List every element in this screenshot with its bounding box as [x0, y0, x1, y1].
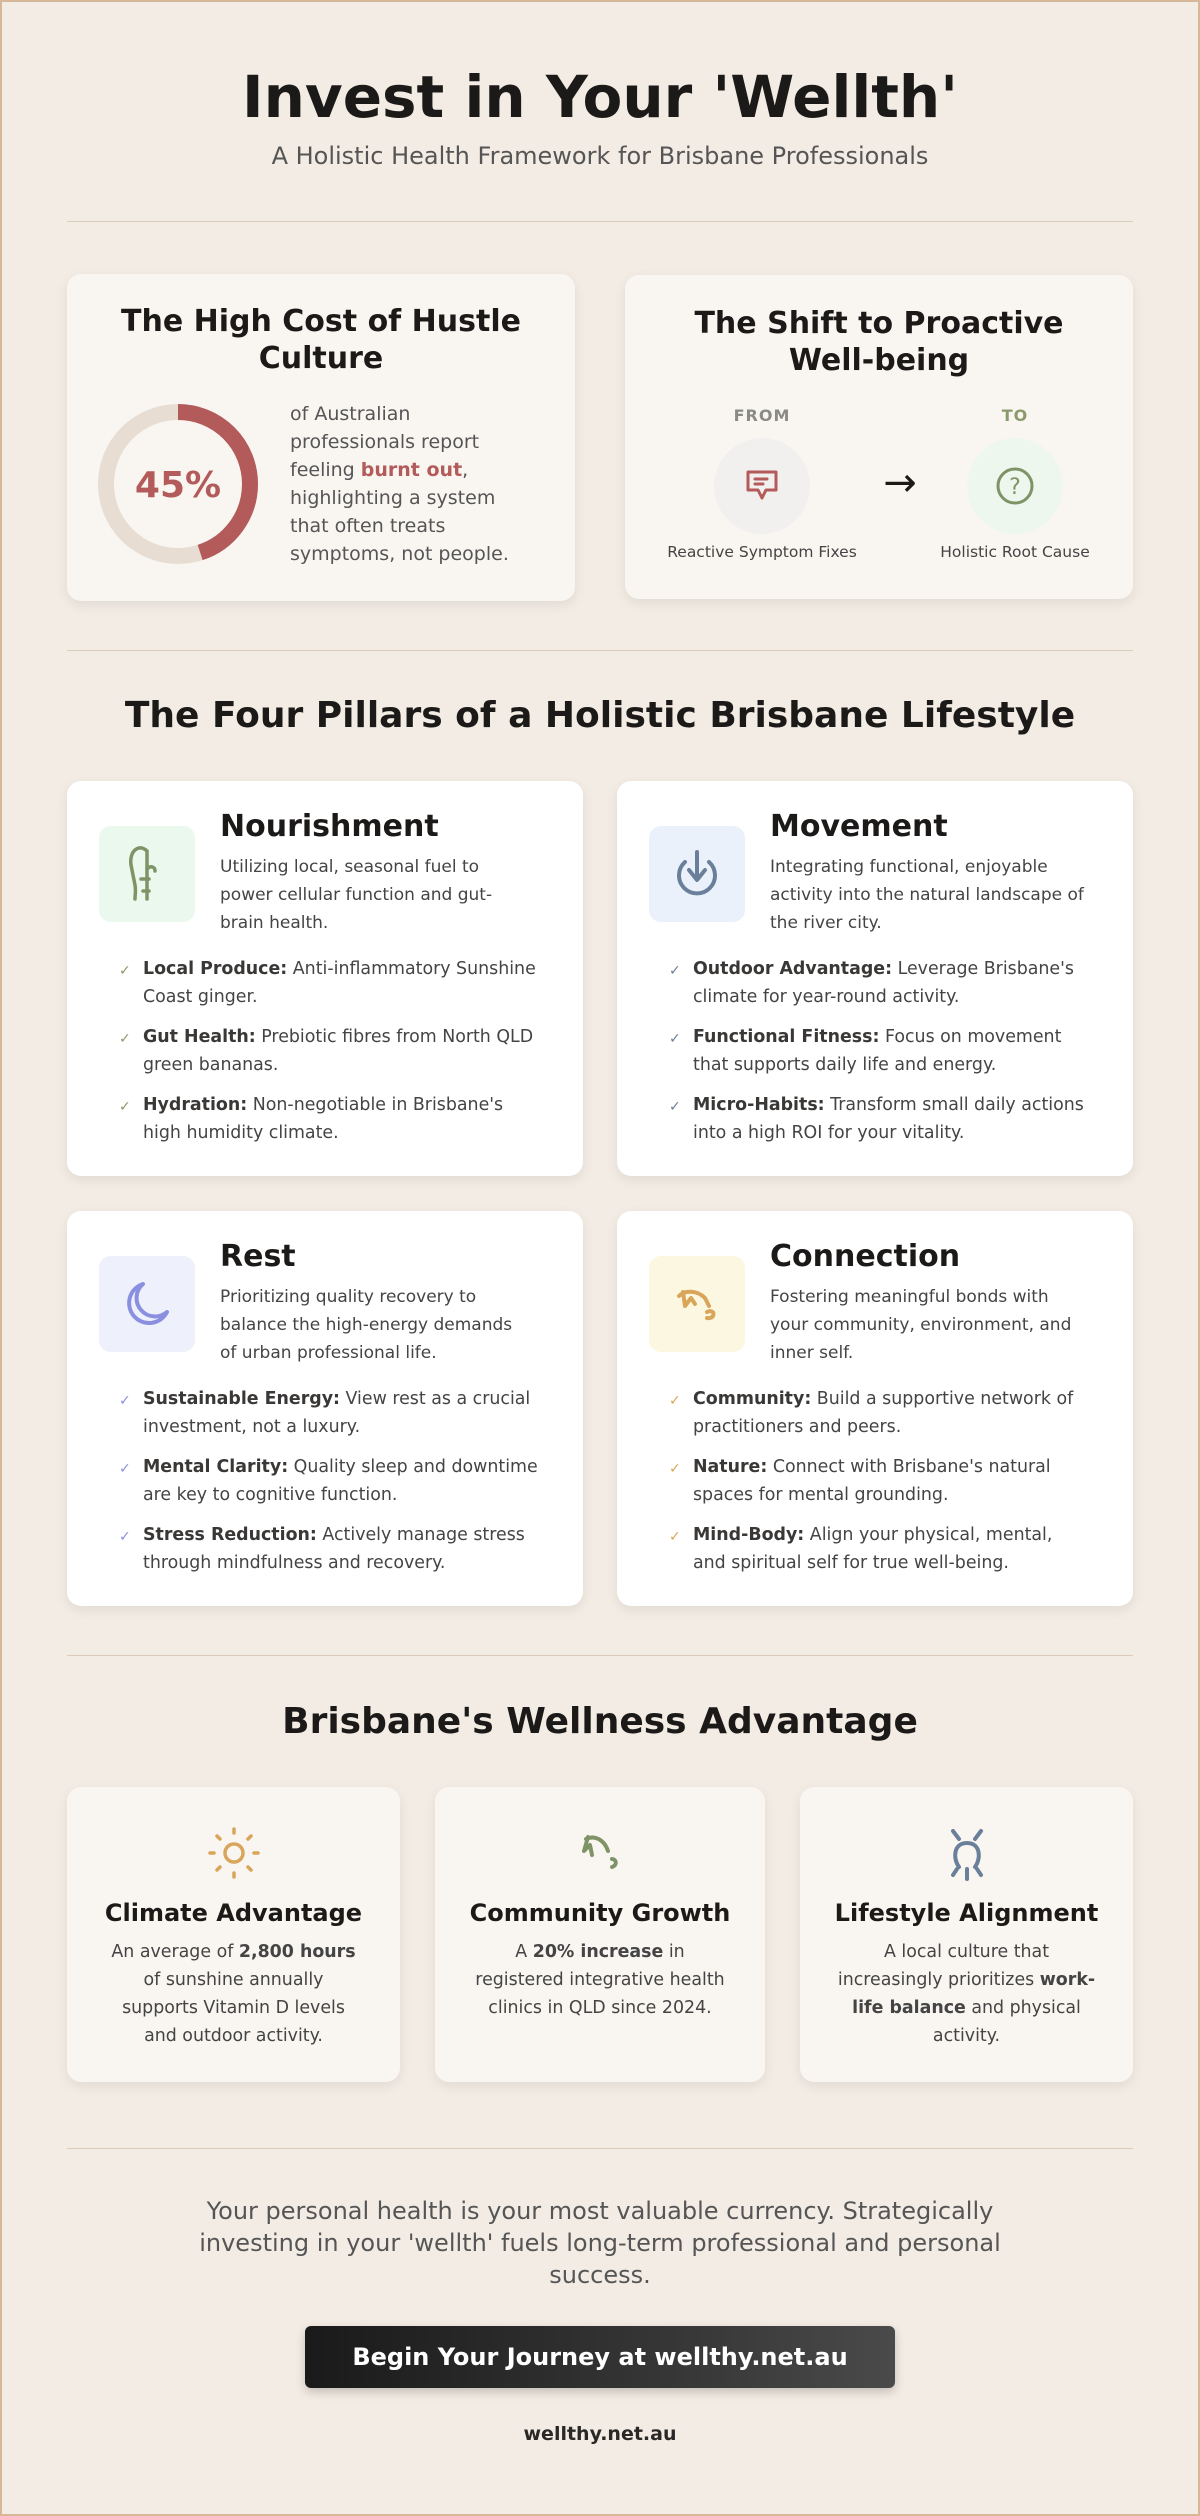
checklist: Nature: Connect with Brisbane's natural spaces for mental grounding. [693, 1457, 1051, 1505]
icon: root cause [967, 438, 1063, 534]
checklist: ✓ [669, 1099, 681, 1115]
description: Prioritizing quality recovery to balance the high-energy demands of urban professional life. [220, 1287, 512, 1363]
description: Utilizing local, seasonal fuel to power cellular function and gut-brain health. [220, 857, 492, 933]
from label: FROM [734, 406, 790, 425]
checklist: Outdoor Advantage: Leverage Brisbane's climate for year-round activity. [693, 959, 1074, 1007]
checklist: Local Produce: Anti-inflammatory Sunshine Coast ginger. [143, 959, 536, 1007]
title: Rest [220, 1239, 296, 1274]
checklist: Mental Clarity: Quality sleep and downtime are key to cognitive function. [143, 1457, 538, 1505]
checklist: ✓ [669, 1393, 681, 1409]
panel: community growth [435, 1787, 765, 2082]
checklist: Micro-Habits: Transform small daily actions into a high ROI for your vitality. [693, 1095, 1084, 1143]
title: Climate Advantage [105, 1899, 362, 1927]
button: cta: Begin Your Journey at wellthy.net.au [352, 2343, 848, 2371]
checklist: Stress Reduction: Actively manage stress through mindfulness and recovery. [143, 1525, 525, 1573]
text: A local culture that increasingly prioritizes work-life balance and physical activity. [838, 1942, 1095, 2046]
icon: nourishment [99, 826, 195, 922]
panel: rest [67, 1211, 583, 1606]
heading: shift: Well-being [789, 343, 969, 378]
donut chart 45% [98, 404, 258, 564]
checklist: ✓ [119, 1393, 131, 1409]
title: Nourishment [220, 809, 439, 844]
title: Lifestyle Alignment [835, 1899, 1098, 1927]
subtitle: A Holistic Health Framework for Brisbane Professionals [272, 142, 928, 170]
description: Integrating functional, enjoyable activity into the natural landscape of the river city. [770, 857, 1084, 933]
title: Connection [770, 1239, 960, 1274]
checklist: Mind-Body: Align your physical, mental, and spiritual self for true well-being. [693, 1525, 1052, 1573]
icon: movement [649, 826, 745, 922]
checklist: Functional Fitness: Focus on movement that supports daily life and energy. [693, 1027, 1061, 1075]
text: A 20% increase in registered integrative health clinics in QLD since 2024. [475, 1942, 725, 2018]
checklist [119, 1389, 538, 1573]
heading: hustle [121, 304, 521, 376]
checklist: ✓ [119, 1529, 131, 1545]
panel: climate [67, 1787, 400, 2082]
footer: wellthy.net.au [524, 2423, 676, 2445]
donut chart 45%: 45% [135, 465, 221, 506]
title: Movement [770, 809, 948, 844]
panel: shift to proactive [625, 275, 1133, 599]
checklist: Gut Health: Prebiotic fibres from North QLD green bananas. [143, 1027, 533, 1075]
panel: connection [617, 1211, 1133, 1606]
icon: connection [649, 1256, 745, 1352]
checklist [119, 959, 536, 1143]
to caption: Holistic Root Cause [940, 543, 1090, 561]
icon: root cause: ? [1009, 475, 1021, 500]
checklist: ✓ [669, 1461, 681, 1477]
icon: lifestyle [950, 1828, 984, 1881]
checklist: ✓ [669, 1031, 681, 1047]
checklist: ✓ [669, 1529, 681, 1545]
checklist: Community: Build a supportive network of practitioners and peers. [693, 1389, 1073, 1437]
icon: growth [582, 1835, 618, 1869]
panel: hustle culture [67, 274, 575, 601]
title: Invest in Your 'Wellth' [242, 63, 958, 131]
checklist: ✓ [669, 963, 681, 979]
heading: four pillars: The Four Pillars of a Holistic Brisbane Lifestyle [125, 695, 1075, 736]
from caption: Reactive Symptom Fixes [667, 543, 857, 561]
checklist: Hydration: Non-negotiable in Brisbane's high humidity climate. [143, 1095, 503, 1143]
checklist: ✓ [119, 1031, 131, 1047]
arrow: → [883, 460, 917, 506]
heading: shift: The Shift to Proactive [694, 306, 1064, 341]
title: Community Growth [470, 1899, 730, 1927]
description: Fostering meaningful bonds with your community, environment, and inner self. [770, 1287, 1071, 1363]
icon: moon [99, 1256, 195, 1352]
heading: hustle: Culture [259, 341, 383, 376]
to label: TO [1002, 406, 1028, 425]
closing statement: Your personal health is your most valuable currency. Strategically investing in your 'wellth' fuels long-term professional and personal success. [199, 2197, 1001, 2289]
panel: movement [617, 781, 1133, 1176]
heading: shift [694, 306, 1064, 378]
stat text: of Australian professionals report feeling burnt out, highlighting a system that often treats symptoms, not people. [290, 403, 509, 565]
heading: wellness advantage: Brisbane's Wellness Advantage [282, 1701, 918, 1742]
button: cta [305, 2326, 895, 2388]
text: An average of 2,800 hours of sunshine annually supports Vitamin D levels and outdoor activity. [111, 1942, 356, 2046]
icon: reactive chat [714, 438, 810, 534]
checklist: ✓ [119, 963, 131, 979]
panel: nourishment [67, 781, 583, 1176]
icon: sun [208, 1827, 260, 1879]
checklist [669, 959, 1084, 1143]
checklist: ✓ [119, 1099, 131, 1115]
checklist: Sustainable Energy: View rest as a crucial investment, not a luxury. [143, 1389, 530, 1437]
checklist [669, 1389, 1074, 1573]
checklist: ✓ [119, 1461, 131, 1477]
panel: lifestyle alignment [800, 1787, 1133, 2082]
heading: hustle: The High Cost of Hustle [121, 304, 521, 339]
